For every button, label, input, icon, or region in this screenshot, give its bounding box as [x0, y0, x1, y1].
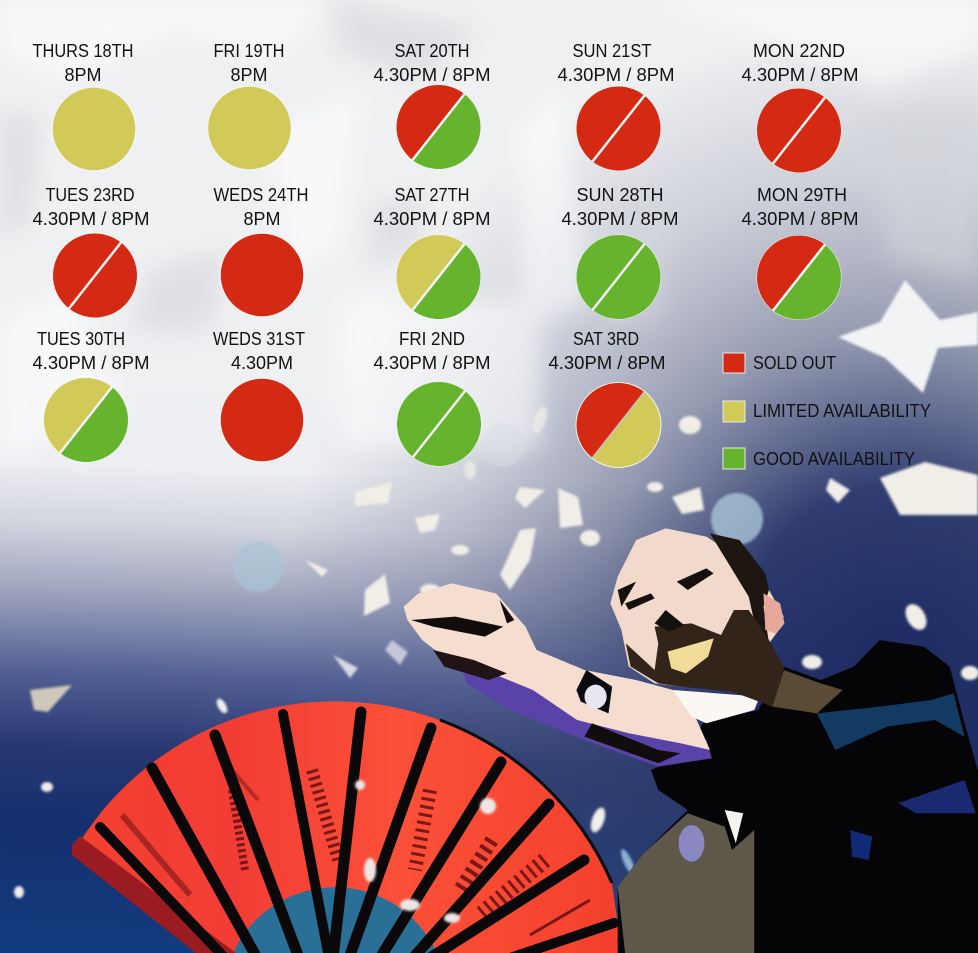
- pie: sold out / sold out: [756, 88, 842, 173]
- label: 4.30PM / 8PM: [558, 65, 674, 85]
- circle: limited: [52, 87, 136, 171]
- illustration: man with arm raised: [404, 528, 978, 953]
- fan speckle marks: [122, 770, 590, 935]
- label: 8PM: [244, 209, 280, 229]
- label: [213, 329, 305, 373]
- label: THURS 18TH: [32, 41, 134, 61]
- fan ribs: [100, 712, 614, 953]
- pie: limited / good: [44, 378, 128, 462]
- label: [32, 329, 150, 373]
- mouth: [668, 638, 714, 673]
- label: 8PM: [230, 65, 268, 85]
- label: [32, 185, 150, 229]
- confetti: [14, 405, 978, 915]
- label: 4.30PM / 8PM: [374, 353, 490, 373]
- label: FRI 2ND: [399, 329, 465, 349]
- date: Fri 19th: [208, 41, 292, 170]
- label: [374, 41, 490, 85]
- date: Mon 29th: [742, 185, 858, 320]
- hair: [710, 533, 769, 643]
- label: SUN 21ST: [572, 41, 652, 61]
- shirt front: [725, 810, 743, 843]
- pie: sold out / sold out: [52, 233, 138, 318]
- label: 4.30PM / 8PM: [562, 209, 678, 229]
- label: 4.30PM / 8PM: [32, 209, 150, 229]
- fan dark lower edge: [72, 836, 236, 953]
- ear: [763, 593, 784, 633]
- illustration: red fan: [72, 701, 622, 953]
- date: Sat 3rd: [548, 329, 666, 468]
- date: Tues 30th: [32, 329, 150, 462]
- label: TUES 23RD: [46, 185, 134, 205]
- background: blurred paper texture: [0, 0, 978, 460]
- date: Sat 20th: [374, 41, 490, 170]
- pie: good / good: [396, 382, 482, 466]
- availability calendar: [32, 41, 858, 468]
- shirt cuff: [673, 690, 760, 723]
- legend: sold out: [723, 353, 836, 373]
- label: [548, 329, 666, 373]
- pie: limited / good: [396, 234, 481, 320]
- legend: limited availability: LIMITED AVAILABILITY: [753, 401, 931, 421]
- label: 4.30PM / 8PM: [32, 353, 150, 373]
- label: [374, 329, 490, 373]
- date: Sun 21st: [558, 41, 674, 171]
- date: Mon 22nd: [742, 41, 858, 173]
- circle: sold out: [220, 233, 304, 317]
- head: [610, 528, 784, 707]
- label: MON 22ND: [753, 41, 845, 61]
- label: 4.30PM / 8PM: [742, 209, 858, 229]
- pie: sold out / good: [396, 84, 481, 170]
- star shape top right: [838, 280, 978, 393]
- sleeve highlights: [817, 693, 976, 860]
- pie: sold out / limited: [576, 382, 662, 468]
- label: [562, 185, 678, 229]
- label: [214, 185, 308, 229]
- label: [32, 41, 134, 85]
- date: Fri 2nd: [374, 329, 490, 466]
- nose and eye shadows: [618, 568, 714, 632]
- jacket lapel: [618, 813, 754, 953]
- label: FRI 19TH: [214, 41, 284, 61]
- baubles: [233, 423, 763, 592]
- label: 8PM: [64, 65, 102, 85]
- date: Sun 28th: [562, 185, 678, 320]
- circle: limited: [208, 86, 292, 170]
- arm and hand: [404, 583, 710, 750]
- jacket: [618, 640, 978, 953]
- legend: [723, 353, 931, 469]
- label: [742, 185, 858, 229]
- label: SAT 3RD: [573, 329, 639, 349]
- date: Weds 31st: [213, 329, 305, 462]
- fan leaf: [72, 701, 622, 953]
- label: SAT 20TH: [394, 41, 470, 61]
- beard: [626, 610, 784, 707]
- label: [374, 185, 490, 229]
- legend: good availability: GOOD AVAILABILITY: [753, 449, 915, 469]
- label: WEDS 31ST: [213, 329, 305, 349]
- date: Weds 24th: [214, 185, 308, 317]
- label: 4.30PM / 8PM: [548, 353, 666, 373]
- label: [558, 41, 674, 85]
- circle: sold out: [220, 378, 304, 462]
- date: Thurs 18th: [32, 41, 136, 171]
- label: SAT 27TH: [394, 185, 470, 205]
- label: 4.30PM / 8PM: [374, 65, 490, 85]
- forearm shadow: [463, 670, 712, 767]
- finger shadow: [411, 617, 503, 637]
- label: 4.30PM: [231, 353, 293, 373]
- date: Sat 27th: [374, 185, 490, 320]
- label: 4.30PM / 8PM: [374, 209, 490, 229]
- legend: sold out: SOLD OUT: [753, 353, 836, 373]
- date: Tues 23rd: [32, 185, 150, 318]
- label: MON 29TH: [757, 185, 847, 205]
- pie: sold out / sold out: [576, 86, 661, 171]
- fan black outer rim on the right: [440, 720, 612, 883]
- label: WEDS 24TH: [214, 185, 308, 205]
- label: [214, 41, 284, 85]
- pie: good / good: [576, 234, 661, 320]
- label: 4.30PM / 8PM: [742, 65, 858, 85]
- fan inner teal panel: [233, 887, 437, 953]
- watch: [576, 670, 612, 713]
- confetti over fan: [355, 780, 496, 923]
- label: [742, 41, 858, 85]
- label: SUN 28TH: [576, 185, 664, 205]
- pie: sold out / good: [756, 235, 842, 320]
- label: TUES 30TH: [37, 329, 125, 349]
